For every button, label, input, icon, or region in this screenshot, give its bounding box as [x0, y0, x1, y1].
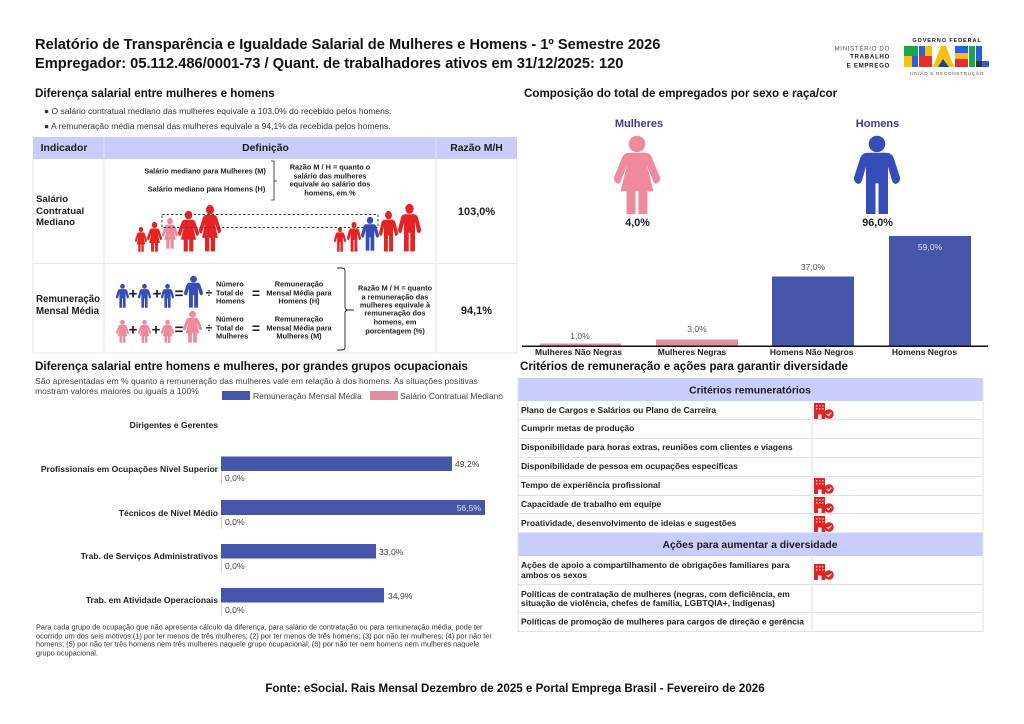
icons: criteria adopted: [814, 403, 834, 532]
formula: women: Número: [216, 314, 244, 324]
definition text: salário mediano: Salário mediano para Homens (H): [148, 184, 266, 194]
subtitle text: mostram valores maiores ou iguais a 100%: [35, 386, 199, 396]
formula: women: Mensal Média para: [266, 324, 333, 332]
footnote: [36, 622, 492, 658]
criteria rows: Disponibilidade para horas extras, reuniões com clientes e viagens: [521, 442, 793, 452]
bar: homens não negros: 37,0%: [801, 262, 826, 272]
bar: mulheres não negras: 1,0%: [570, 331, 590, 341]
formula: men: +: [129, 286, 138, 302]
action rows: Políticas de promoção de mulheres para cargos de direção e gerência: [521, 616, 804, 626]
legend: Salário Contratual Mediano: [400, 391, 503, 401]
value: 103,0%: 103,0%: [458, 206, 495, 218]
value: 94,1%: 94,1%: [461, 305, 492, 317]
row: profissionais: [41, 456, 480, 485]
title: Relatório de Transparência e Igualdade Salarial de Mulheres e Homens - 1º Semestre 2026: [35, 37, 660, 53]
legend: Remuneração Mensal Média: [253, 391, 362, 401]
bar: homens não negros: Homens Não Negros: [770, 347, 854, 357]
row label: remuneração mensal média: Remuneração: [36, 294, 100, 305]
source footer: Fonte: eSocial. Rais Mensal Dezembro de 2025 e Portal Emprega Brasil - Fevereiro de 2026: [265, 683, 765, 695]
row label: remuneração mensal média: [36, 294, 100, 317]
logo: Ministério do Trabalho e Emprego: [834, 46, 890, 70]
table header: Definição: [242, 143, 289, 154]
header: ações para aumentar a diversidade: Ações para aumentar a diversidade: [662, 540, 838, 551]
icon: homens 96,0%: 96,0%: [862, 217, 893, 229]
bar: homens negros: Homens Negros: [892, 347, 957, 357]
row: serviços administrativos: Trab. de Serviços Administrativos: [81, 551, 218, 561]
row: profissionais: 0,0%: [225, 473, 245, 483]
row label: salário contratual mediano: Mediano: [36, 217, 75, 228]
subtitle text: [35, 376, 478, 396]
row: profissionais: 49,2%: [455, 459, 480, 469]
row: serviços administrativos: [81, 544, 404, 572]
table header: [41, 143, 503, 154]
row: atividade operacional: [86, 588, 413, 616]
bar: mulheres não negras: Mulheres Não Negras: [535, 347, 622, 357]
bullet text: ● O salário contratual mediano das mulheres equivale a 103,0% do recebido pelos homens.: [44, 106, 392, 116]
icon: mulheres 4,0%: 4,0%: [625, 217, 650, 229]
icon: homens 96,0%: Homens: [856, 118, 899, 130]
action rows: Políticas de contratação de mulheres (negras, com deficiência, em: [521, 589, 790, 599]
bar: homens negros: 59,0%: [918, 242, 943, 252]
formula: women: =: [175, 322, 184, 338]
definition text: salário mediano: Razão M / H = quanto o: [290, 162, 371, 172]
footnote: ocorrido um dos seis motivos:(1) por ter menos de três mulheres; (2) por ter menos de três homens; (3) por não ter mulheres; (4) por não ter: [36, 632, 492, 640]
heading: diferença por grupos ocupacionais: Diferença salarial entre homens e mulheres, por grandes grupos ocupacionais: [35, 360, 468, 373]
row label: salário contratual mediano: [36, 194, 84, 228]
formula: men: Mensal Média para: [266, 288, 333, 298]
formula: men: =: [252, 285, 260, 301]
formula: women: Mulheres: [216, 332, 248, 340]
logo: Ministério do Trabalho e Emprego: TRABALHO: [850, 54, 890, 60]
bar: mulheres não negras: [535, 331, 622, 357]
heading: diferença salarial entre mulheres e homens: Diferença salarial entre mulheres e homens: [35, 87, 275, 100]
formula: men: =: [175, 286, 184, 302]
row: técnicos: 56,5%: [457, 503, 481, 513]
row: profissionais: Profissionais em Ocupações Nível Superior: [41, 464, 219, 474]
definition text: razão remuneração: [337, 268, 433, 350]
icons: men by salary: [334, 204, 421, 252]
action rows: ambos os sexos: [521, 570, 587, 580]
icon: action adopted: [814, 564, 834, 580]
criteria rows: Cumprir metas de produção: [521, 423, 634, 433]
formula: men: Remuneração: [275, 280, 324, 288]
footnote: homens; (5) por não ter três homens nem três mulheres naquele grupo ocupacional; (6) por não ter nem homens nem mulheres naquele: [36, 640, 479, 648]
legend: [222, 391, 503, 401]
panel: criteria table: [518, 378, 983, 632]
criteria rows: Plano de Cargos e Salários ou Plano de Carreira: [521, 405, 716, 415]
row label: salário contratual mediano: Salário: [36, 194, 68, 205]
formula: women: Total de: [216, 324, 244, 332]
criteria rows: Capacidade de trabalho em equipe: [521, 499, 662, 509]
action rows: Ações de apoio a compartilhamento de obrigações familiares para: [521, 560, 790, 570]
definition text: salário mediano: Salário mediano para Mulheres (M): [144, 166, 266, 176]
icon: mulheres 4,0%: Mulheres: [615, 118, 663, 130]
definition text: salário mediano: [144, 161, 371, 200]
logo: Governo Federal Brasil: GOVERNO FEDERAL: [912, 38, 982, 44]
logo: Governo Federal Brasil: UNIÃO E RECONSTRUÇÃO: [910, 70, 984, 77]
panel: indicator table: [33, 137, 517, 353]
definition text: salário mediano: salário das mulheres: [293, 172, 367, 180]
header: critérios remuneratórios: Critérios remuneratórios: [689, 386, 811, 396]
subtitle text: São apresentadas em % quanto a remuneração das mulheres vale em relação à dos homens. As situações positivas: [35, 376, 478, 386]
footnote: Para cada grupo de ocupação que não apresenta cálculo da diferença, para salário de contratação ou para remuneração média, pode ter: [36, 622, 483, 632]
heading: composição do total: Composição do total de empregados por sexo e raça/cor: [524, 87, 838, 100]
definition text: razão remuneração: mulheres equivale à: [360, 300, 431, 310]
icon: mulheres 4,0%: [614, 118, 663, 229]
row label: remuneração mensal média: Mensal Média: [36, 306, 100, 317]
action rows: [521, 560, 804, 626]
table header: Razão M/H: [450, 143, 503, 154]
formula: women: ÷: [206, 321, 213, 335]
bar: mulheres negras: [656, 324, 738, 357]
row: técnicos: 0,0%: [225, 517, 245, 527]
title: Empregador: 05.112.486/0001-73 / Quant. de trabalhadores ativos em 31/12/2025: 120: [35, 56, 623, 72]
bar: homens negros: [889, 236, 971, 357]
title: [35, 37, 660, 72]
definition text: salário mediano: equivale ao salário dos: [290, 180, 370, 188]
formula: women: Remuneração: [275, 314, 324, 324]
criteria rows: [521, 405, 793, 528]
definition text: salário mediano: homens, em %: [304, 188, 356, 198]
row: atividade operacional: Trab. em Atividade Operacionais: [86, 595, 218, 605]
formula: men: Homens: [216, 296, 245, 306]
formula: women: [116, 311, 333, 343]
formula: men: Total de: [216, 288, 244, 298]
definition text: razão remuneração: remuneração dos: [364, 308, 426, 318]
icon: homens 96,0%: [854, 118, 900, 229]
bar chart: composição por sexo e raça: [522, 236, 988, 357]
logo: Ministério do Trabalho e Emprego: MINISTÉRIO DO: [834, 46, 890, 52]
row label: salário contratual mediano: Contratual: [36, 206, 84, 217]
formula: women: =: [252, 320, 260, 336]
formula: men: +: [153, 286, 162, 302]
formula: women: +: [152, 322, 161, 338]
formula: men: Homens (H): [278, 296, 320, 306]
definition text: razão remuneração: a remuneração das: [362, 292, 428, 302]
row: atividade operacional: 0,0%: [225, 605, 245, 615]
bullet text: [44, 106, 392, 131]
logo: Ministério do Trabalho e Emprego: E EMPREGO: [847, 62, 890, 70]
criteria rows: Disponibilidade de pessoa em ocupações específicas: [521, 461, 738, 471]
definition text: razão remuneração: Razão M / H = quanto: [358, 284, 433, 292]
bar: mulheres negras: 3,0%: [687, 324, 707, 334]
row: serviços administrativos: 0,0%: [225, 561, 245, 571]
table header: Indicador: [41, 143, 87, 154]
row: serviços administrativos: 33,0%: [379, 547, 404, 557]
row: atividade operacional: 34,9%: [388, 591, 413, 601]
row: técnicos: [119, 500, 485, 529]
criteria rows: Proatividade, desenvolvimento de ideias e sugestões: [521, 518, 737, 528]
formula: women: Mulheres (M): [276, 332, 322, 340]
formula: women: +: [129, 322, 138, 338]
action rows: situação de violência, chefes de família, LGBTQIA+, Indígenas): [521, 598, 775, 608]
formula: men: Número: [216, 280, 244, 288]
bar: homens não negros: [770, 262, 854, 357]
logo: Governo Federal Brasil: [904, 38, 989, 77]
formula: men: ÷: [206, 286, 213, 300]
definition text: razão remuneração: homens, em: [374, 318, 417, 326]
formula: men: [116, 276, 333, 308]
icons: women by salary: [135, 205, 221, 252]
criteria rows: Tempo de experiência profissional: [521, 480, 660, 490]
heading: critérios de remuneração: Critérios de remuneração e ações para garantir diversidade: [520, 360, 849, 373]
bar: mulheres negras: Mulheres Negras: [658, 347, 727, 357]
bullet text: ● A remuneração média mensal das mulheres equivale a 94,1% da recebida pelos homens.: [44, 121, 391, 131]
row: técnicos: Técnicos de Nível Médio: [119, 508, 218, 518]
footnote: grupo ocupacional.: [36, 648, 98, 658]
definition text: razão remuneração: porcentagem (%): [365, 326, 425, 336]
horizontal bar chart: grupos ocupacionais: [41, 420, 485, 616]
row: dirigentes e gerentes: Dirigentes e Gerentes: [130, 420, 218, 430]
